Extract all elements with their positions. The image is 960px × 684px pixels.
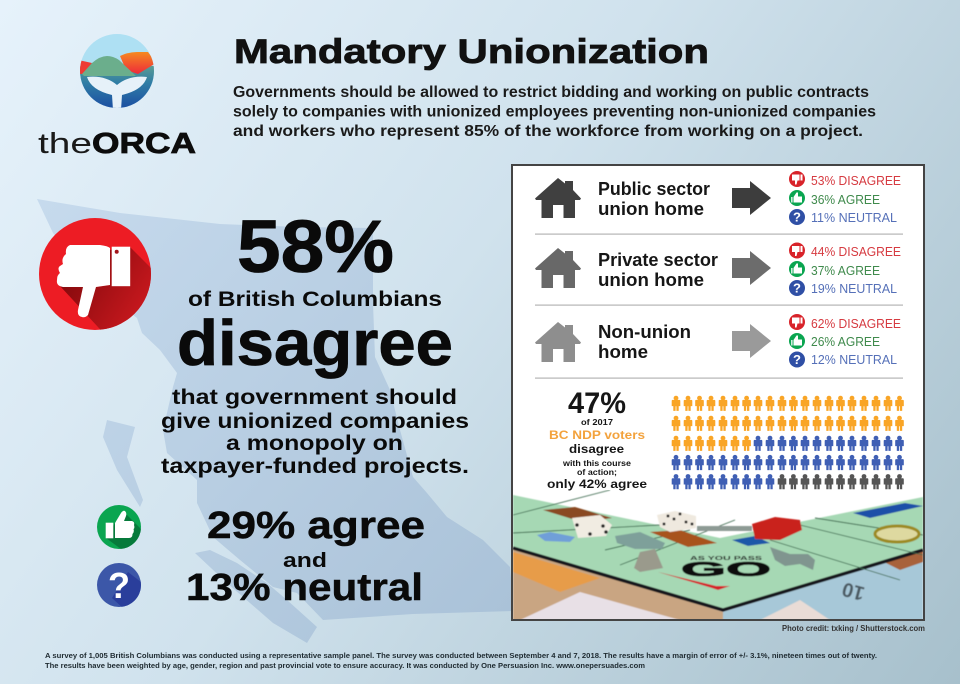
statement text: taxpayer-funded projects. (161, 454, 469, 478)
NDP voters callout: only 42% agree (547, 479, 647, 491)
money below the board (513, 548, 723, 620)
icon: green thumbs up (97, 505, 141, 549)
statement text: a monopoly on (226, 431, 403, 455)
logo wordmark (38, 128, 196, 160)
survey methodology footnote: The results have been weighted by age, gender, region and past provincial vote to ensure accuracy. It was conducted by One Persuasion Inc. www.onepersuades.com (45, 661, 645, 670)
headline statistic: 58%: 58% (237, 205, 394, 288)
row: non-union home: Non-union (598, 322, 691, 342)
row: public sector union home: 53% DISAGREE (811, 174, 901, 188)
map of British Columbia (37, 199, 514, 643)
photo: Monopoly board (513, 490, 923, 620)
property colour strips (543, 507, 612, 522)
row: non-union home: 26% AGREE (811, 335, 880, 349)
photo credit: Photo credit: txking / Shutterstock.com (782, 624, 925, 633)
statistic: 13% neutral: 13% neutral (186, 567, 423, 609)
row: private sector union home (535, 242, 901, 296)
row: private sector union home: 19% NEUTRAL (811, 282, 897, 296)
row: public sector union home: 11% NEUTRAL (811, 211, 897, 225)
NDP voters callout: of action; (577, 467, 617, 477)
title: Mandatory Unionization (234, 33, 709, 71)
pictogram chart: 47 orange, 42 blue, 11 grey (672, 396, 904, 489)
row: non-union home: ? (793, 352, 801, 367)
NDP voters callout: of 2017 (581, 417, 613, 427)
dice (572, 515, 612, 538)
NDP voters callout: 47% (568, 387, 626, 420)
statement text: that government should (172, 385, 457, 409)
intro paragraph: solely to companies with unionized employees preventing non-unionized companies (233, 104, 876, 120)
intro paragraph: Governments should be allowed to restrict bidding and working on public contracts (233, 84, 869, 101)
logo emblem (78, 34, 156, 110)
logo: theORCA (38, 34, 196, 160)
logo wordmark: the (38, 128, 92, 160)
icon: red thumbs down (39, 218, 151, 330)
GO square: GO (681, 559, 771, 581)
row: private sector union home: 37% AGREE (811, 264, 880, 278)
statement text (161, 385, 469, 478)
red hotel (752, 517, 802, 540)
statement text: give unionized companies (161, 409, 469, 433)
intro paragraph: and workers who represent 85% of the workforce from working on a project. (233, 123, 863, 140)
icon: blue question mark (97, 563, 141, 607)
metal tokens (615, 532, 665, 549)
row: public sector union home: 36% AGREE (811, 193, 880, 207)
NDP voters callout: BC NDP voters (549, 428, 645, 442)
row: non-union home: home (598, 342, 648, 362)
logo wordmark: ORCA (92, 128, 196, 160)
row: public sector union home: Public sector (598, 179, 710, 199)
row: public sector union home: union home (598, 199, 704, 219)
row: non-union home (535, 314, 901, 368)
survey methodology footnote (45, 651, 877, 670)
Monopoly ring token (875, 526, 919, 542)
subhead: of British Columbians: of British Columbians (188, 288, 442, 311)
row: public sector union home (535, 171, 901, 225)
row: non-union home: 12% NEUTRAL (811, 353, 897, 367)
board surface (513, 495, 923, 610)
row: private sector union home: 44% DISAGREE (811, 245, 901, 259)
photo: Monopoly board: 10 (840, 577, 867, 604)
icon: blue question mark: ? (108, 565, 130, 606)
connector word: and: and (283, 550, 327, 572)
NDP voters callout (547, 387, 647, 491)
statistic: 29% agree: 29% agree (207, 505, 425, 547)
survey methodology footnote: A survey of 1,005 British Columbians was conducted using a representative sample panel. The survey was conducted between September 4 and 7, 2018. The results have a margin of error of +/- 3.1%, nineteen times out of twenty. (45, 651, 877, 660)
NDP voters callout: with this course (562, 458, 631, 468)
headline word: disagree: disagree (177, 307, 453, 379)
photo: Monopoly board: AS YOU PASS (690, 556, 763, 562)
row: non-union home: 62% DISAGREE (811, 317, 901, 331)
row: public sector union home: ? (793, 210, 801, 224)
row: private sector union home: ? (793, 280, 801, 296)
panel: household breakdown and photo (512, 165, 924, 620)
row: private sector union home: union home (598, 270, 704, 290)
row: private sector union home: Private sector (598, 250, 718, 270)
intro paragraph (233, 84, 876, 140)
NDP voters callout: disagree (569, 442, 624, 456)
